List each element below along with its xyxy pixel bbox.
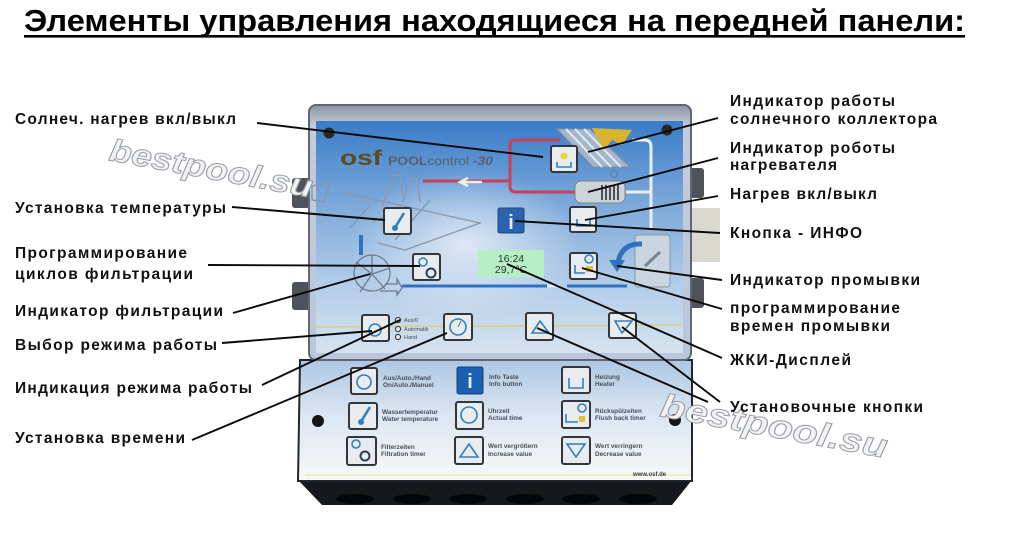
logo: osf bbox=[340, 147, 383, 170]
lower label panel bbox=[298, 360, 692, 481]
button: filtration programming bbox=[413, 254, 440, 280]
logo bbox=[340, 147, 493, 170]
right labels bbox=[729, 93, 937, 416]
button: solar heating bbox=[551, 146, 577, 172]
mode indicators: Automatik bbox=[404, 327, 429, 333]
side bracket bbox=[690, 208, 720, 262]
mode indicators bbox=[395, 317, 429, 341]
red solar circuit bbox=[423, 140, 576, 192]
LCD display: 29,7°C bbox=[495, 264, 528, 276]
legend: heater: Heizung bbox=[595, 374, 620, 381]
right labels: ЖКИ-Дисплей bbox=[729, 352, 851, 369]
watermark lower: bestpool.su bbox=[658, 387, 891, 465]
solar collector bbox=[557, 128, 632, 167]
side hinges bbox=[292, 168, 704, 310]
legend: flush timer bbox=[562, 401, 646, 428]
legend: water temperature: Wassertemperatur bbox=[382, 409, 438, 416]
leader lines bbox=[192, 118, 722, 440]
left labels: Индикация режима работы bbox=[15, 380, 252, 397]
blue front panel bbox=[316, 121, 683, 353]
website: www.osf.de bbox=[632, 472, 667, 478]
left labels: Выбор режима работы bbox=[15, 337, 217, 354]
lid frame bbox=[309, 105, 691, 360]
controller device bbox=[292, 105, 720, 505]
flush valve bbox=[609, 235, 670, 287]
legend: mode: On/Auto./Manuel bbox=[383, 382, 434, 389]
mode indicators: Aus/0 bbox=[404, 318, 418, 324]
legend: clock: Uhrzeit bbox=[488, 408, 511, 415]
yellow stripe bbox=[312, 325, 682, 327]
legend: increase: Increase value bbox=[488, 451, 533, 458]
legend: heater bbox=[562, 367, 620, 393]
left labels: циклов фильтрации bbox=[15, 266, 193, 283]
legend: filter timer: Filtration timer bbox=[381, 451, 426, 458]
pool sketch bbox=[345, 175, 480, 250]
legend grid on lower panel bbox=[347, 367, 667, 478]
legend: flush timer: Flush back timer bbox=[595, 415, 646, 422]
right labels: Кнопка - ИНФО bbox=[730, 225, 862, 242]
left labels: Солнеч. нагрев вкл/выкл bbox=[15, 111, 236, 128]
lower housing base bbox=[298, 480, 692, 505]
filtration pump bbox=[354, 255, 402, 295]
legend: flush timer: Rückspülzeiten bbox=[595, 408, 642, 415]
legend: increase bbox=[455, 437, 538, 464]
button: clock bbox=[444, 314, 472, 340]
legend: clock bbox=[456, 402, 523, 429]
left labels: Программирование bbox=[15, 245, 187, 262]
legend: info: Info Taste bbox=[489, 374, 519, 381]
right labels: Индикатор работы bbox=[730, 93, 895, 110]
button: heating bbox=[570, 207, 596, 232]
legend: info: Info button bbox=[489, 381, 522, 388]
flow arrow white bbox=[460, 178, 482, 186]
LCD display bbox=[478, 250, 544, 277]
legend: water temperature: Water temperature bbox=[382, 416, 439, 423]
left labels bbox=[15, 111, 252, 447]
left labels: Индикатор фильтрации bbox=[15, 303, 223, 320]
blue filtration pipe bbox=[402, 284, 627, 288]
cable glands bbox=[336, 494, 657, 504]
legend: clock: Actual time bbox=[488, 415, 523, 422]
legend: water temperature bbox=[349, 403, 439, 429]
right labels: Индикатор роботы bbox=[730, 140, 895, 157]
watermark upper: bestpool.su bbox=[107, 132, 316, 204]
button: info bbox=[498, 208, 524, 234]
right labels: нагревателя bbox=[730, 157, 837, 174]
button: temperature bbox=[384, 208, 411, 234]
legend: decrease bbox=[562, 437, 643, 464]
button: flush programming bbox=[570, 253, 597, 279]
button: info: i bbox=[508, 212, 514, 234]
legend: info: i bbox=[467, 371, 473, 393]
left labels: Установка времени bbox=[15, 430, 185, 447]
heater bbox=[575, 170, 625, 203]
right labels: времен промывки bbox=[730, 318, 890, 335]
legend: decrease: Wert verringern bbox=[595, 443, 643, 450]
legend: decrease: Decrease value bbox=[595, 451, 642, 458]
button: mode select bbox=[362, 315, 389, 341]
legend: mode bbox=[351, 368, 434, 394]
legend: mode: Aus/Auto./Hand bbox=[383, 375, 431, 382]
logo: POOL control -30 bbox=[388, 154, 493, 168]
faint side symbol bbox=[312, 182, 330, 202]
right labels: Установочные кнопки bbox=[730, 399, 923, 416]
left labels: Установка температуры bbox=[15, 200, 226, 217]
LCD display: 16:24 bbox=[498, 253, 524, 265]
button: increase bbox=[526, 313, 553, 340]
legend: filter timer: Filterzeiten bbox=[381, 444, 415, 451]
lid screws bbox=[324, 128, 334, 138]
button: decrease bbox=[609, 313, 636, 338]
right labels: программирование bbox=[730, 300, 900, 317]
legend: info bbox=[457, 367, 522, 394]
title: Элементы управления находящиеся на передней панели: bbox=[24, 3, 965, 38]
right labels: Нагрев вкл/выкл bbox=[730, 186, 877, 203]
right labels: Индикатор промывки bbox=[730, 272, 920, 289]
legend: increase: Wert vergrößern bbox=[488, 443, 538, 450]
legend: filter timer bbox=[347, 437, 426, 465]
mode indicators: Hand bbox=[404, 335, 417, 341]
right labels: солнечного коллектора bbox=[730, 111, 937, 128]
legend: heater: Heater bbox=[595, 381, 615, 388]
white return pipe bbox=[626, 140, 651, 228]
